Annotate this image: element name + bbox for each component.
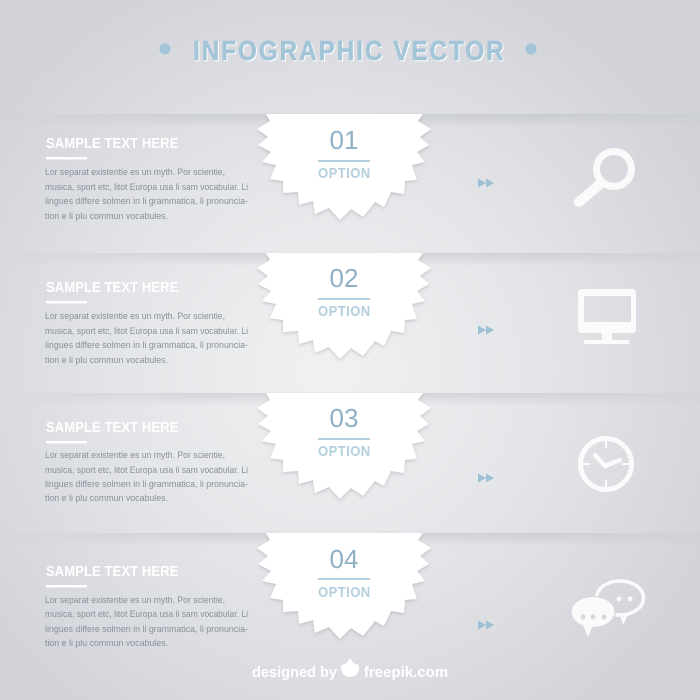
heading 2: SAMPLE TEXT HERE [46, 279, 178, 295]
body text 3: tion e li plu commun vocabules. [45, 492, 168, 503]
number 02: 02 [330, 263, 358, 293]
heading 3: SAMPLE TEXT HERE [46, 419, 178, 435]
heading rule 3 [46, 441, 87, 444]
footer credit [252, 658, 448, 681]
option label 4: OPTION [318, 584, 370, 600]
heading rule 1 [46, 157, 87, 160]
title text: INFOGRAPHIC VECTOR [194, 38, 505, 67]
starburst 4 [257, 533, 431, 639]
title text: INFOGRAPHIC VECTOR [193, 37, 504, 66]
number rule 1 [318, 160, 370, 162]
credit text right: freepik.com [364, 664, 448, 681]
body text 1 [45, 166, 248, 221]
body text 2 [45, 310, 248, 365]
body text 2: lingues differe solmen in li grammatica, li pronuncia- [45, 339, 248, 350]
number rule 4 [318, 578, 370, 580]
title right dot [526, 44, 536, 54]
number 04: 04 [330, 544, 358, 574]
icon: freepik logo [341, 658, 359, 677]
body text 4: lingues differe solmen in li grammatica, li pronuncia- [45, 623, 248, 634]
credit text left: designed by [252, 664, 338, 681]
icon: clock [580, 438, 632, 490]
heading rule 4 [46, 585, 87, 588]
panel: step 01 [45, 114, 632, 221]
starburst 1 [257, 114, 431, 220]
icon: monitor [578, 289, 636, 344]
number 03: 03 [330, 403, 358, 433]
heading 1: SAMPLE TEXT HERE [46, 135, 178, 151]
body text 4 [45, 594, 248, 648]
band shadows [80, 114, 652, 542]
body text 2: tion e li plu commun vocabules. [45, 354, 168, 365]
arrow 1 [478, 178, 494, 188]
body text 3 [45, 449, 248, 503]
heading 4: SAMPLE TEXT HERE [46, 563, 178, 579]
starburst 2 [257, 253, 431, 359]
body text 1: tion e li plu commun vocabules. [45, 210, 168, 221]
title [160, 37, 536, 67]
icon: speech bubbles [572, 581, 644, 637]
option label 2: OPTION [318, 303, 370, 319]
arrow 4 [478, 620, 494, 630]
number rule 3 [318, 438, 370, 440]
panel: step 04 [45, 533, 644, 648]
heading rule 2 [46, 301, 87, 304]
body text 1: Lor separat existentie es un myth. Por scientie, [45, 166, 225, 177]
option label 3: OPTION [318, 443, 370, 459]
option label 1: OPTION [318, 165, 370, 181]
body text 2: Lor separat existentie es un myth. Por scientie, [45, 310, 225, 321]
starburst 3 [257, 393, 431, 499]
body text 4: tion e li plu commun vocabules. [45, 637, 168, 648]
body text 3: Lor separat existentie es un myth. Por scientie, [45, 449, 225, 460]
title left dot [160, 44, 170, 54]
body text 2: musica, sport etc, litot Europa usa li sam vocabular. Li [45, 325, 248, 336]
number 01: 01 [330, 125, 358, 155]
body text 3: musica, sport etc, litot Europa usa li sam vocabular. Li [45, 464, 248, 475]
arrow 2 [478, 326, 494, 334]
icon: magnifying glass [579, 152, 632, 202]
body text 4: Lor separat existentie es un myth. Por scientie, [45, 594, 225, 605]
body text 3: lingues differe solmen in li grammatica, li pronuncia- [45, 478, 248, 489]
body text 1: musica, sport etc, litot Europa usa li sam vocabular. Li [45, 181, 248, 192]
panel: step 03 [45, 393, 632, 503]
arrow 3 [478, 474, 494, 482]
panel: step 02 [45, 253, 636, 365]
number rule 2 [318, 298, 370, 300]
body text 1: lingues differe solmen in li grammatica, li pronuncia- [45, 195, 248, 206]
body text 4: musica, sport etc, litot Europa usa li sam vocabular. Li [45, 608, 248, 619]
